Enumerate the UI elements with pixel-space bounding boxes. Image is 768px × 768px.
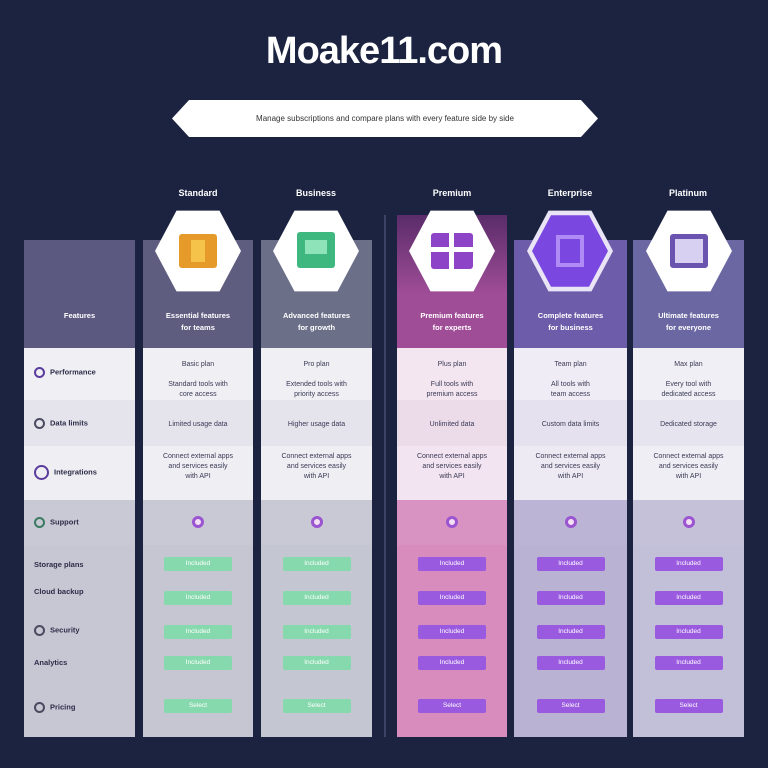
panel: Platinum: Included: [676, 560, 701, 567]
icon: Business hexagon: [273, 208, 359, 294]
panel: Enterprise: with API: [558, 473, 583, 480]
panel: Premium: for experts: [433, 323, 471, 332]
panel: Business: Included: [304, 594, 329, 601]
panel: Platinum: dedicated access: [661, 391, 716, 398]
panel: Standard: core access: [179, 391, 217, 398]
panel: Premium: Connect external apps: [417, 453, 487, 460]
panel: Enterprise: Connect external apps: [535, 453, 606, 460]
panel: Premium: [397, 215, 507, 737]
panel: Platinum: [633, 240, 744, 737]
panel: labels column: Support: [50, 517, 79, 526]
panel: Business: Extended tools with: [286, 381, 347, 388]
panel: Standard: Included: [186, 659, 210, 666]
panel: Platinum: Max plan: [674, 361, 703, 368]
panel: Standard: with API: [185, 473, 211, 480]
panel: Business: Included: [304, 659, 329, 666]
panel: Platinum: Every tool with: [666, 381, 711, 388]
text: Platinum: [669, 188, 707, 198]
panel: labels column: Storage plans: [34, 560, 84, 569]
panel: Enterprise: [514, 240, 627, 737]
panel: labels column: Data limits: [50, 418, 88, 427]
panel: Enterprise: Included: [558, 560, 583, 567]
subtitle banner: [172, 100, 598, 137]
panel: labels column: Performance: [50, 367, 96, 376]
icon: Platinum hexagon: [646, 208, 732, 294]
panel: Standard: Essential features: [166, 311, 230, 320]
column captions: Standard: [178, 188, 218, 198]
panel: Premium: and services easily: [422, 463, 482, 470]
panel: Premium: Unlimited data: [430, 421, 474, 428]
panel: Platinum: with API: [676, 473, 701, 480]
panel: labels column: Features: [64, 311, 95, 320]
panel: Platinum: for everyone: [666, 323, 711, 332]
panel: Enterprise: All tools with: [551, 381, 590, 388]
panel: Enterprise: team access: [551, 391, 590, 398]
panel: Standard: Standard tools with: [168, 381, 228, 388]
panel: Platinum: Connect external apps: [653, 453, 724, 460]
panel: labels column: Integrations: [54, 467, 97, 476]
text: Enterprise: [548, 188, 592, 198]
panel: Business: Higher usage data: [288, 421, 345, 428]
panel: Business: Pro plan: [303, 361, 330, 368]
panel: Enterprise: Included: [558, 628, 583, 635]
panel: Business: Included: [304, 628, 329, 635]
text: Premium: [433, 188, 471, 198]
panel: Premium: Plus plan: [438, 361, 466, 368]
panel: Enterprise: Select: [561, 702, 580, 709]
panel: labels column: Cloud backup: [34, 587, 84, 596]
panel: Standard: Connect external apps: [163, 453, 233, 460]
panel: labels column: Pricing: [50, 702, 75, 711]
icon: Premium hexagon: [409, 208, 495, 294]
panel: Platinum: Included: [676, 594, 701, 601]
panel: Premium: Included: [440, 560, 464, 567]
panel: Enterprise: and services easily: [541, 463, 600, 470]
panel: Business: Included: [304, 560, 329, 567]
text: Business: [296, 188, 336, 198]
panel: Enterprise: for business: [548, 323, 593, 332]
subtitle banner: Manage subscriptions and compare plans with every feature side by side: [256, 114, 514, 123]
panel: Premium: Included: [440, 594, 464, 601]
panel: Premium: Included: [440, 659, 464, 666]
panel: labels column: Security: [50, 625, 80, 634]
panel: Platinum: Dedicated storage: [660, 421, 717, 428]
panel: Standard: Limited usage data: [168, 421, 228, 428]
panel: Premium: premium access: [427, 391, 477, 398]
panel: Enterprise: Included: [558, 659, 583, 666]
panel: Business: and services easily: [287, 463, 346, 470]
panel: Platinum: Included: [676, 659, 701, 666]
panel: labels column: Analytics: [34, 658, 67, 667]
panel: Business: Advanced features: [283, 311, 350, 320]
panel: Standard: Included: [186, 560, 210, 567]
panel: Business: with API: [304, 473, 329, 480]
panel: Business: Connect external apps: [281, 453, 352, 460]
panel: Standard: Basic plan: [182, 361, 214, 368]
panel: Standard: Included: [186, 628, 210, 635]
panel: Standard: [143, 240, 253, 737]
panel: Platinum: Ultimate features: [658, 311, 719, 320]
panel: labels column: [24, 240, 135, 737]
panel: Standard: and services easily: [168, 463, 228, 470]
panel: Premium: Full tools with: [431, 381, 473, 388]
panel: Standard: for teams: [181, 323, 215, 332]
panel: Business: [261, 240, 372, 737]
panel: Platinum: and services easily: [659, 463, 718, 470]
panel: Platinum: Included: [676, 628, 701, 635]
panel: Enterprise: Complete features: [538, 311, 603, 320]
panel: Enterprise: Team plan: [554, 361, 587, 368]
panel: Business: for growth: [298, 323, 335, 332]
panel: Premium: Included: [440, 628, 464, 635]
panel: Enterprise: Custom data limits: [542, 421, 599, 428]
icon: Standard hexagon: [155, 208, 241, 294]
panel: Standard: Select: [189, 702, 207, 709]
panel: Standard: Included: [186, 594, 210, 601]
panel: Business: priority access: [294, 391, 339, 398]
icon: Enterprise hexagon: [527, 208, 613, 294]
panel: Premium: Select: [443, 702, 461, 709]
divider: [384, 215, 386, 737]
panel: Business: Select: [307, 702, 326, 709]
panel: Premium: Premium features: [420, 311, 484, 320]
panel: Premium: with API: [439, 473, 465, 480]
title: Moake11.com: [266, 30, 502, 72]
panel: Platinum: Select: [679, 702, 698, 709]
panel: Enterprise: Included: [558, 594, 583, 601]
